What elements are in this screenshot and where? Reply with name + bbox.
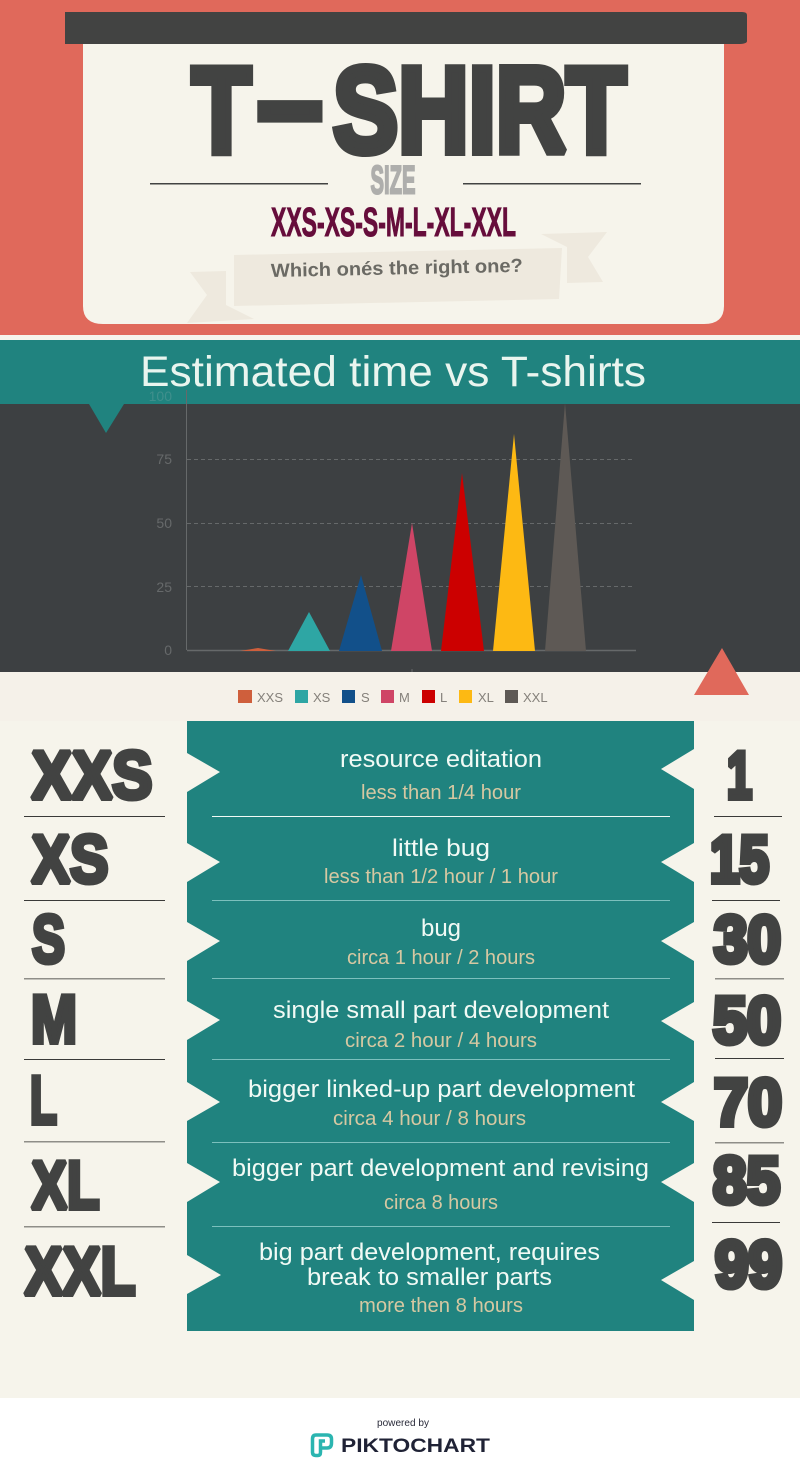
row descriptions: less than 1/4 hour — [361, 782, 521, 804]
size labels: XXS — [32, 738, 152, 814]
size values: 1 — [727, 738, 752, 812]
size labels — [24, 738, 152, 1310]
y axis labels: 25 — [156, 579, 172, 595]
section banner — [0, 340, 800, 404]
size labels: XS — [32, 822, 108, 898]
y axis labels — [149, 388, 172, 658]
row descriptions: resource editation — [340, 746, 542, 773]
size values: 30 — [714, 902, 781, 976]
title: - — [256, 33, 324, 169]
size values: 85 — [713, 1143, 780, 1217]
legend: S — [361, 690, 370, 705]
legend: XS — [313, 690, 331, 705]
title: T — [192, 42, 251, 178]
row descriptions: circa 1 hour / 2 hours — [347, 947, 535, 969]
title: SHIRT — [333, 42, 626, 178]
row descriptions: break to smaller parts — [307, 1264, 552, 1291]
left rules — [24, 816, 165, 1228]
divider left — [150, 183, 328, 184]
size values: 50 — [713, 983, 781, 1057]
legend: L — [440, 690, 447, 705]
dark top bar — [65, 12, 747, 44]
section heading: Estimated time vs T-shirts — [140, 348, 646, 396]
piktochart wordmark: PIKTOCHART — [341, 1436, 490, 1457]
size labels: XXL — [24, 1234, 136, 1310]
row descriptions — [232, 746, 649, 1317]
coral header background — [0, 0, 800, 335]
row descriptions: circa 4 hour / 8 hours — [333, 1108, 526, 1130]
subtitle: size: SIZE — [370, 158, 416, 202]
size values: 15 — [710, 822, 769, 896]
row descriptions: single small part development — [273, 997, 609, 1024]
size labels: S — [32, 902, 65, 978]
icon: piktochart logo — [312, 1435, 332, 1456]
right rules — [712, 816, 784, 1223]
ribbon — [187, 232, 607, 323]
size labels: M — [31, 982, 77, 1058]
row descriptions: big part development, requires — [259, 1239, 600, 1266]
size labels: XL — [32, 1148, 100, 1224]
divider right — [463, 183, 641, 184]
legend background — [0, 672, 800, 721]
powered by: powered by — [377, 1417, 430, 1429]
panel: chart section — [0, 340, 800, 721]
row descriptions: bigger linked-up part development — [248, 1076, 635, 1103]
row descriptions: more then 8 hours — [359, 1295, 523, 1317]
size values: 99 — [715, 1227, 782, 1301]
size values — [710, 738, 782, 1301]
row descriptions: little bug — [392, 835, 490, 862]
size values: 70 — [714, 1065, 782, 1139]
center rules — [212, 816, 670, 1227]
size labels: L — [30, 1062, 57, 1138]
banner pointer — [89, 404, 124, 433]
triangle bars — [240, 403, 586, 651]
row descriptions: bigger part development and revising — [232, 1155, 649, 1182]
size list: XXS-XS-S-M-L-XL-XXL — [271, 199, 516, 245]
y axis labels: 0 — [164, 642, 172, 658]
row descriptions: circa 2 hour / 4 hours — [345, 1030, 537, 1052]
y axis labels: 75 — [156, 451, 172, 467]
teal ribbon — [187, 721, 694, 1331]
ribbon question: Which onés the right one? — [271, 256, 523, 282]
gridlines and axes — [186, 390, 636, 672]
legend: XL — [478, 690, 494, 705]
coral triangle accent — [694, 648, 749, 695]
panel: footer — [0, 1398, 800, 1478]
footer background — [0, 1398, 800, 1478]
legend: XXS — [257, 690, 283, 705]
legend — [238, 690, 548, 705]
legend: XXL — [523, 690, 548, 705]
panel: title header — [0, 0, 800, 335]
y axis labels: 100 — [149, 388, 172, 404]
panel: size table — [24, 721, 784, 1331]
row descriptions: bug — [421, 915, 461, 942]
row descriptions: circa 8 hours — [384, 1192, 498, 1214]
paper card — [83, 44, 724, 324]
legend: M — [399, 690, 410, 705]
y axis labels: 50 — [156, 515, 172, 531]
row descriptions: less than 1/2 hour / 1 hour — [324, 866, 558, 888]
dark chart background — [0, 404, 800, 672]
